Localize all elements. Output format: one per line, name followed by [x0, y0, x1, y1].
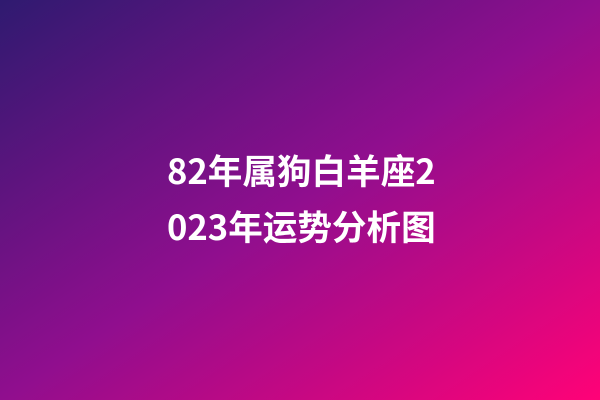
title	[167, 144, 436, 250]
title: 023年运势分析图	[167, 200, 436, 250]
title: 82年属狗白羊座2	[167, 144, 436, 194]
